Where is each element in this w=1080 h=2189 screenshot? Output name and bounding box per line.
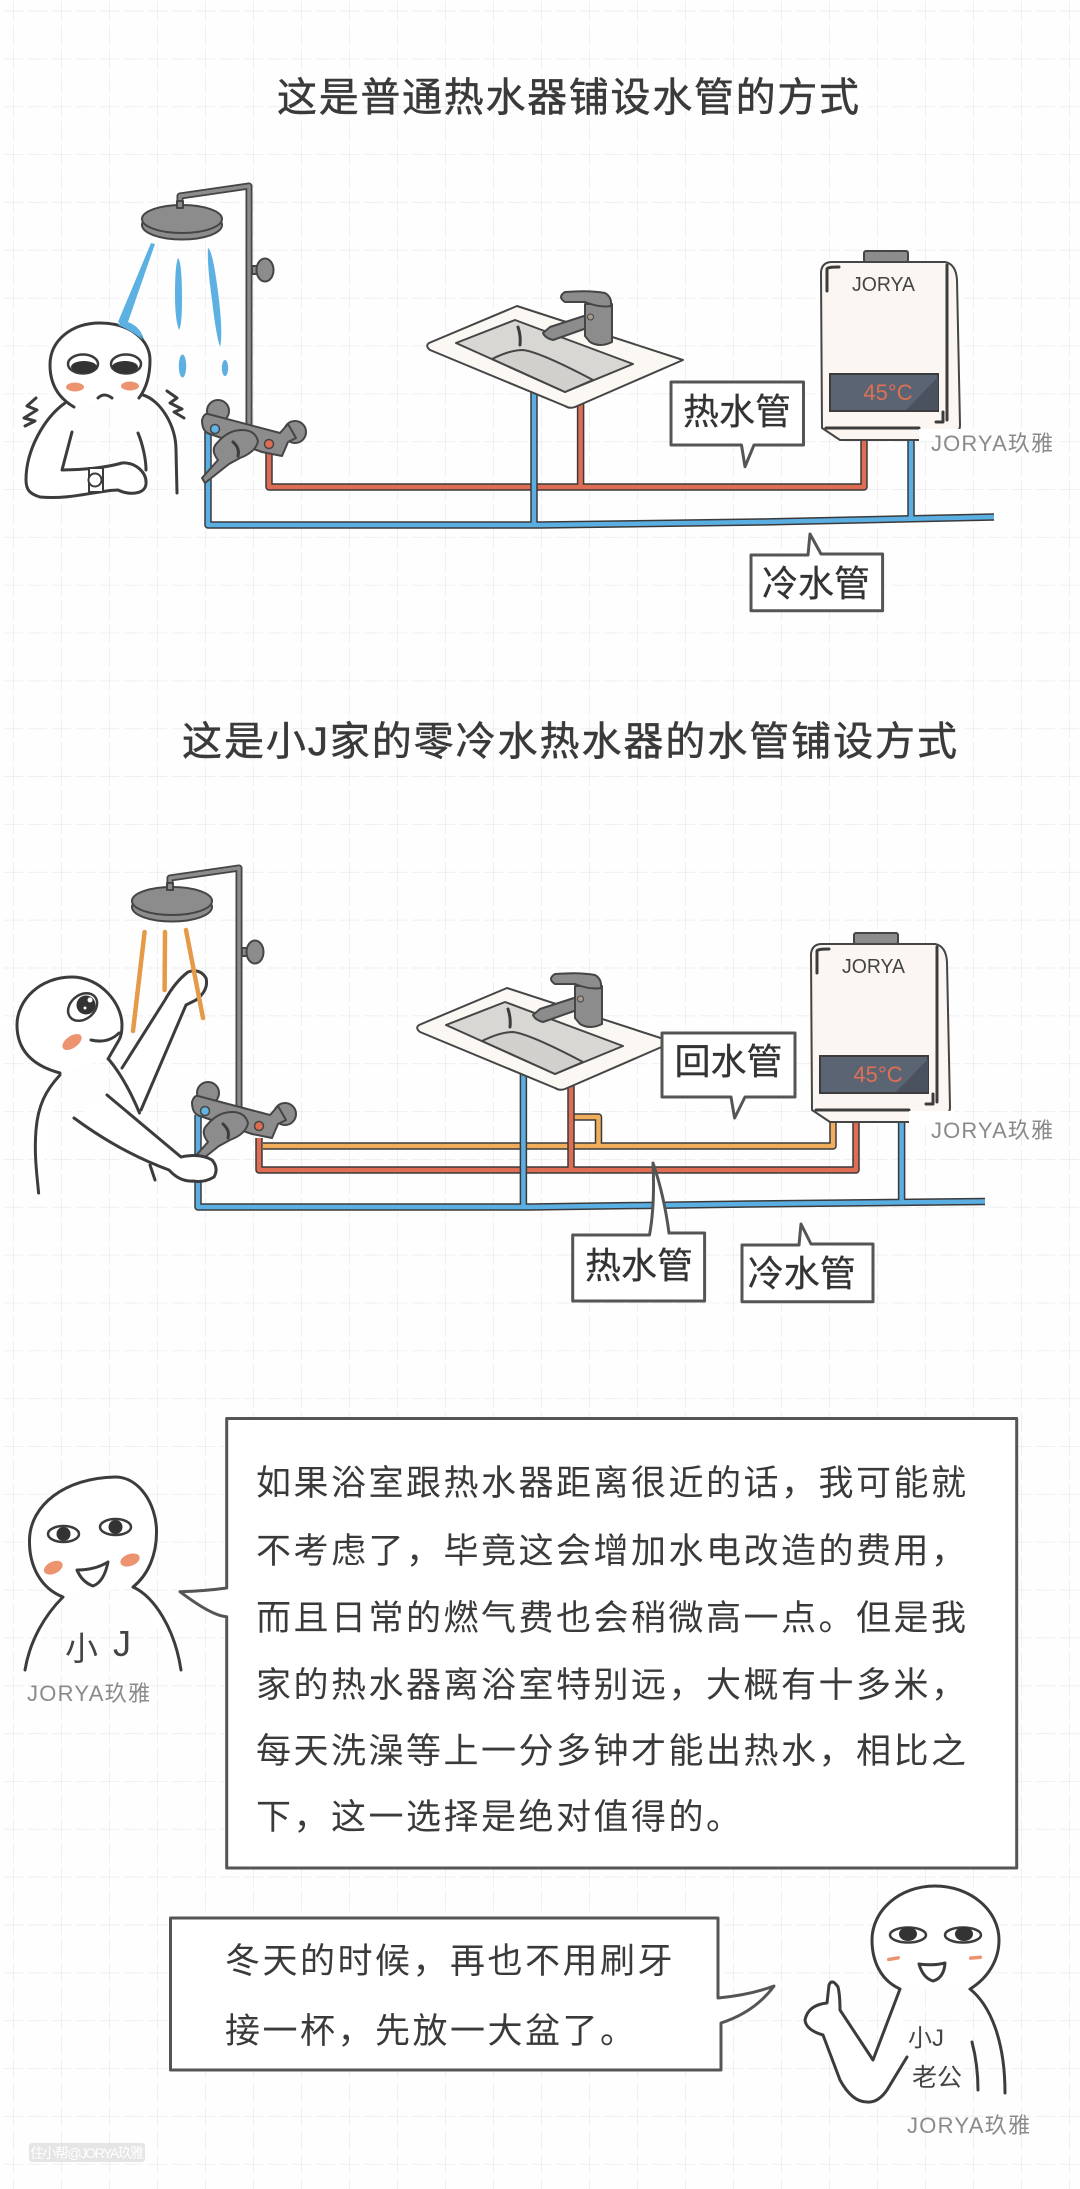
warm water streams [133,930,203,1031]
hot water pipe [269,400,864,487]
water heater: 45°C [853,1062,903,1087]
label: hot water pipe: 热水管 [585,1245,693,1286]
watermark: JORYA玖雅 [907,2113,1030,2138]
bubble text [256,1464,969,1837]
scene 2: zero-cold-water piping diagram [17,868,1053,1302]
water heater: JORYA [842,956,906,978]
watermark: JORYA玖雅 [27,1681,150,1706]
label: hot water pipe [671,382,804,467]
character: Xiao J [25,1477,181,1670]
water heater [821,251,965,441]
character: Xiao J: J [113,1623,131,1664]
label: return water pipe [662,1033,795,1118]
label: return water pipe: 回水管 [674,1041,783,1082]
water heater: 45°C [863,380,913,405]
label: cold water pipe [751,534,883,611]
shivering person checking watch [24,323,184,498]
title: ordinary water heater piping: 这是普通热水器铺设水管的方式 [277,76,859,120]
bubble text: 下，这一选择是绝对值得的。 [256,1798,744,1837]
hot water pipe [259,1082,856,1170]
character: husband with thumbs up: 小J [908,2025,944,2052]
label: cold water pipe: 冷水管 [748,1253,856,1294]
scene 1: ordinary piping diagram [24,186,1053,611]
return water pipe [263,1117,833,1147]
shower column [142,186,274,427]
character: husband with thumbs up: 老公 [912,2064,962,2092]
wash basin [417,973,673,1090]
bubble text: 每天洗澡等上一分多钟才能出热水，相比之 [256,1732,969,1771]
bubble text [225,1942,675,2051]
bubble text: 冬天的时候，再也不用刷牙 [225,1942,675,1981]
title: zero-cold-water heater piping: 这是小J家的零冷水热水器的水管铺设方式 [182,720,957,764]
cold water pipe [208,390,994,525]
speech section: Xiao J's husband [170,1886,1030,2138]
bubble text: 而且日常的燃气费也会稍微高一点。但是我 [256,1599,969,1638]
water heater [811,933,955,1123]
cold water streams [118,243,228,378]
shower column [132,868,264,1109]
watermark: JORYA玖雅 [931,431,1053,456]
label: hot water pipe [573,1163,705,1301]
small speech bubble [170,1918,774,2070]
happy person testing warm water [17,971,216,1193]
label: hot water pipe: 热水管 [683,391,791,432]
bubble text: 接一杯，先放一大盆了。 [225,2012,638,2051]
label: cold water pipe: 冷水管 [762,563,870,604]
bubble text: 不考虑了，毕竟这会增加水电改造的费用， [256,1532,969,1571]
cold water pipe [198,1072,985,1207]
bubble text: 如果浴室跟热水器距离很近的话，我可能就 [256,1464,969,1503]
character: Xiao J: 小 [65,1630,98,1667]
water heater: JORYA [852,274,916,296]
bubble text: 家的热水器离浴室特别远，大概有十多米， [256,1666,969,1705]
character: husband with thumbs up [805,1886,1005,2102]
large speech bubble [180,1418,1017,1868]
label: cold water pipe [742,1224,873,1302]
shower mixer valve [192,1082,296,1165]
speech section: Xiao J [25,1418,1017,1868]
shower mixer valve [202,400,306,483]
wash basin [427,291,683,408]
source watermark: 住小帮@JORYA玖雅 [30,2145,144,2161]
watermark: JORYA玖雅 [931,1118,1053,1143]
